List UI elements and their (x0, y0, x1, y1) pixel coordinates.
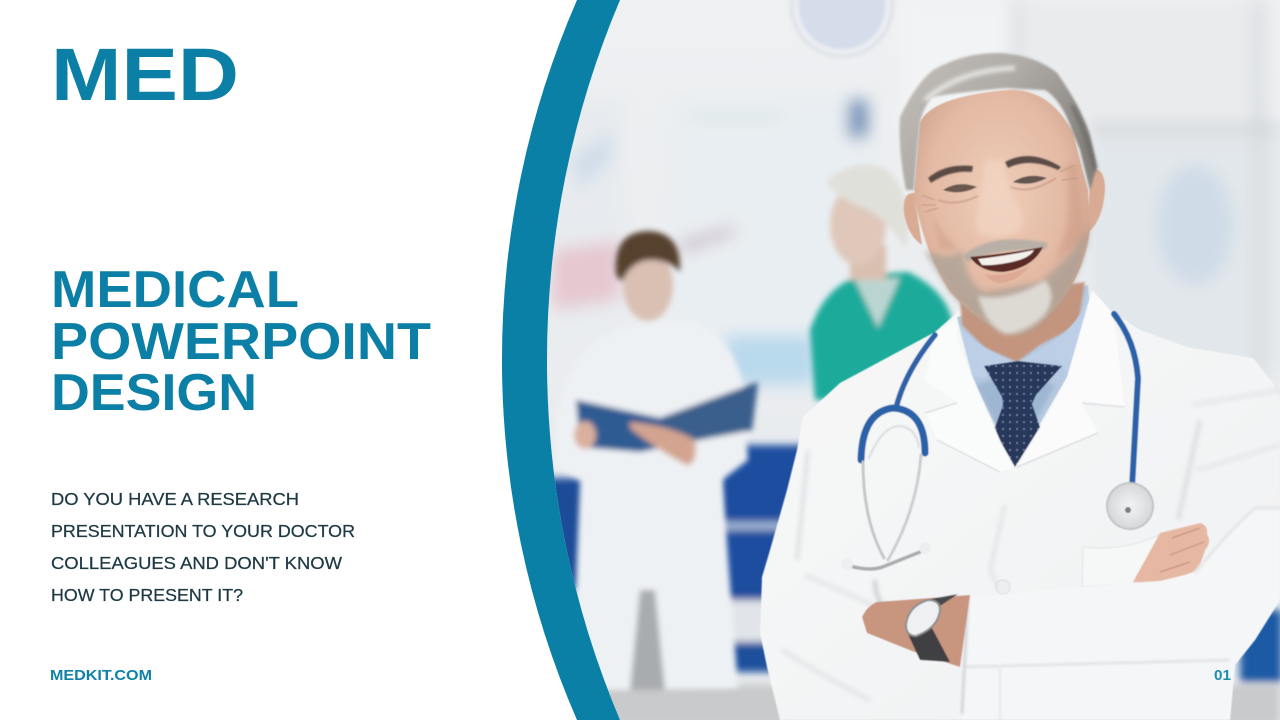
right hand (1133, 523, 1209, 584)
background nurse in green scrubs (810, 165, 952, 400)
heading: MEDICAL (51, 261, 299, 319)
chin beard (978, 280, 1052, 334)
page number: 01 (1214, 667, 1231, 684)
moustache (963, 239, 1047, 262)
right sleeve (1098, 575, 1273, 658)
main doctor (760, 53, 1280, 720)
heading: POWERPOINT (51, 313, 431, 371)
shirt (956, 284, 1090, 426)
white lab coat (760, 300, 1280, 720)
body text: DO YOU HAVE A RESEARCH (51, 489, 299, 509)
neck (960, 282, 1085, 362)
eyes (922, 165, 1078, 212)
cheek shading (935, 166, 1082, 254)
stethoscope ear tips (848, 550, 922, 568)
photo: doctors in clinic (540, 0, 1280, 720)
body text: PRESENTATION TO YOUR DOCTOR (51, 521, 355, 541)
heading: DESIGN (51, 364, 257, 422)
coat folds and shadows (782, 390, 1280, 700)
left forearm with wrist (862, 595, 970, 667)
website: MEDKIT.COM (50, 667, 152, 684)
body text (51, 489, 355, 605)
side beard stubble (924, 225, 1090, 335)
background doctor with folder (555, 231, 758, 690)
pocket and button (996, 533, 1163, 594)
blue bench and floor (540, 445, 1280, 720)
collar (958, 312, 1082, 376)
clock (792, 0, 892, 56)
lapels (972, 382, 1002, 444)
hair (900, 53, 1097, 190)
eyebrows (928, 156, 1061, 183)
teal curved band (502, 0, 620, 720)
body text: COLLEAGUES AND DON'T KNOW (51, 553, 342, 573)
mouth (970, 247, 1043, 283)
blurred clinic background (540, 0, 1280, 720)
wristwatch (906, 594, 958, 662)
face (914, 90, 1090, 335)
ears (904, 169, 1105, 245)
logo: MED: MED (51, 33, 239, 116)
necktie (984, 361, 1062, 467)
stethoscope chest piece (1106, 482, 1154, 530)
body text: HOW TO PRESENT IT? (51, 585, 243, 605)
heading (51, 261, 431, 422)
stethoscope (850, 314, 1138, 569)
